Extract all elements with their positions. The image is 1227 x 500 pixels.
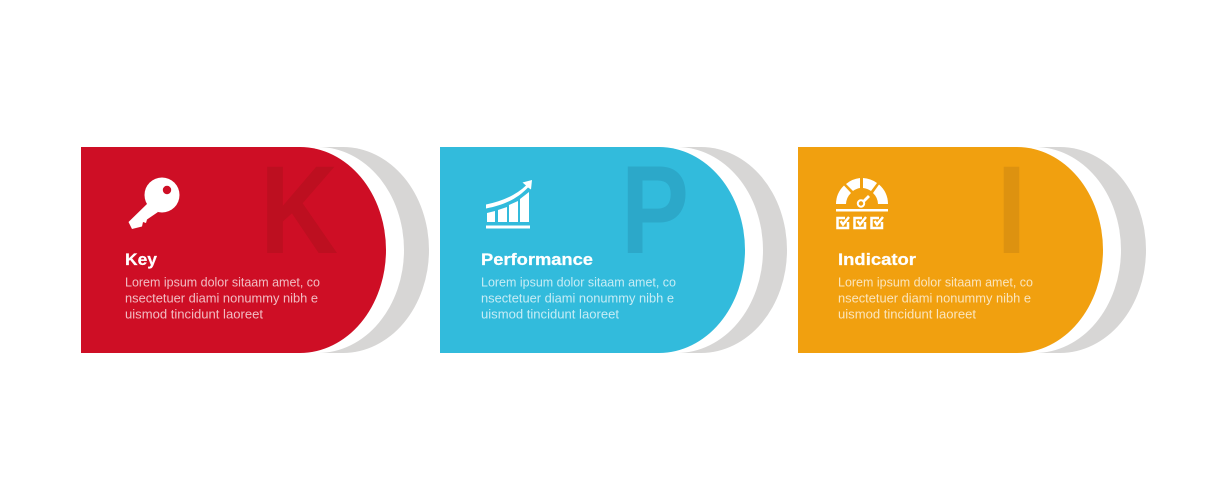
body text: Lorem ipsum dolor sitaam amet, co <box>481 274 676 290</box>
body text: nsectetuer diami nonummy nibh e <box>481 290 674 306</box>
panel: Performance <box>440 141 787 353</box>
body text <box>838 274 1033 322</box>
white crescent <box>300 147 404 353</box>
heading: Performance: Performance <box>481 251 593 269</box>
panel: Key <box>81 141 429 353</box>
back grey crescent <box>679 147 787 353</box>
white crescent <box>1017 147 1121 353</box>
body text: uismod tincidunt laoreet <box>481 306 619 322</box>
body text: nsectetuer diami nonummy nibh e <box>838 290 1031 306</box>
panel: Indicator <box>798 141 1146 353</box>
red card <box>81 147 386 353</box>
back grey crescent <box>1037 147 1146 353</box>
orange card <box>798 147 1103 353</box>
icon: key <box>128 178 180 229</box>
body text: Lorem ipsum dolor sitaam amet, co <box>838 274 1033 290</box>
icon: gauge with checklist <box>836 178 888 228</box>
blue card <box>440 147 745 353</box>
back grey crescent <box>320 147 429 353</box>
heading: Key: Key <box>125 251 158 269</box>
body text: nsectetuer diami nonummy nibh e <box>125 290 318 306</box>
letter P: P <box>621 141 689 280</box>
body text: Lorem ipsum dolor sitaam amet, co <box>125 274 320 290</box>
icon: growth chart <box>486 180 532 228</box>
body text: uismod tincidunt laoreet <box>125 306 263 322</box>
white crescent <box>659 147 763 353</box>
body text <box>481 274 676 322</box>
heading: Indicator: Indicator <box>838 251 917 269</box>
body text <box>125 274 320 322</box>
body text: uismod tincidunt laoreet <box>838 306 976 322</box>
letter K: K <box>260 141 338 280</box>
letter I: I <box>996 141 1026 280</box>
